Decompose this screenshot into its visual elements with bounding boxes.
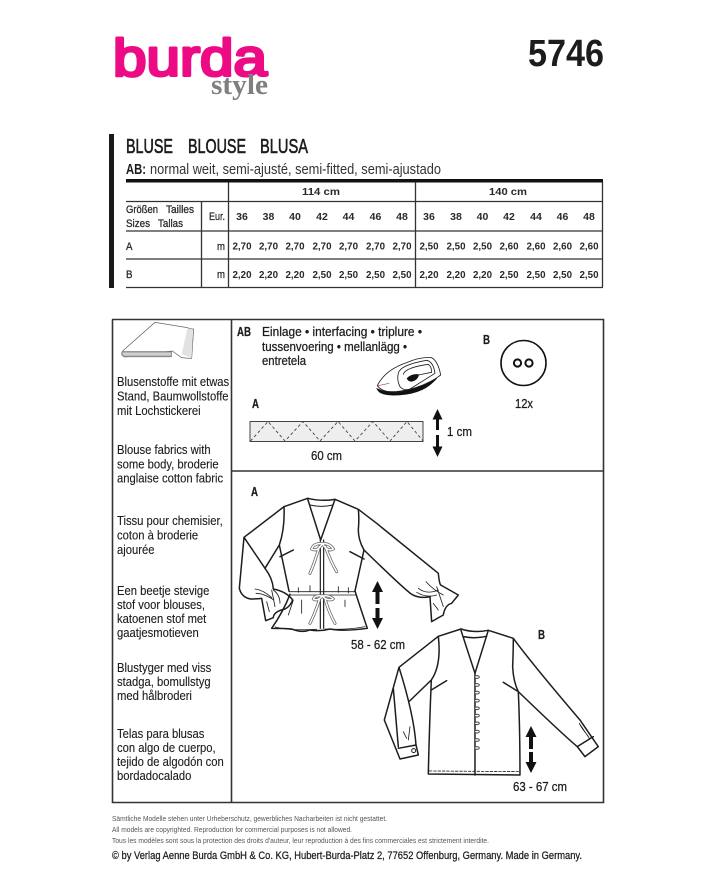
interfacing text [237, 324, 422, 368]
yardage table: 2,50 [526, 269, 546, 281]
interfacing text: tussenvoering • mellanlägg • [262, 340, 407, 354]
text: Spanish: Telas para blusas [117, 726, 204, 741]
text: Swedish [117, 660, 211, 703]
interfacing text: AB [237, 324, 251, 339]
text: French [117, 513, 223, 557]
yardage table: 36 [236, 211, 248, 223]
text: German [117, 374, 229, 418]
yardage table: 2,50 [553, 269, 572, 281]
yardage table: 2,70 [312, 240, 332, 252]
copyright notes: Sämtliche Modelle stehen unter Urheberschutz, gewerbliches Nacharbeiten ist nicht gestattet. [112, 814, 387, 823]
yardage table: A [126, 241, 133, 253]
illustration: blouse B [384, 629, 598, 775]
yardage table: B [126, 269, 132, 281]
text: Spanish: con algo de cuerpo, [117, 740, 216, 755]
yardage table: Sizes [126, 218, 150, 230]
yardage table: 2,50 [580, 269, 599, 281]
yardage table: Tailles [166, 204, 194, 216]
yardage table: Tallas [158, 218, 183, 230]
yardage table: 114 cm [302, 186, 340, 198]
garment B label: B [538, 627, 545, 642]
yardage table: 2,20 [286, 269, 305, 281]
yardage table: 42 [316, 211, 328, 223]
yardage table: 38 [450, 211, 462, 223]
yardage table: 44 [343, 211, 354, 223]
arrow: length A [351, 581, 405, 652]
yardage table: 2,70 [259, 240, 278, 252]
heading: BLUSA [260, 136, 308, 158]
copyright notes [112, 814, 582, 862]
yardage table: Größen [126, 204, 158, 216]
yardage table: 2,50 [500, 269, 519, 281]
yardage table: 2,70 [339, 240, 358, 252]
interfacing text: Einlage • interfacing • triplure • [262, 325, 422, 339]
icon: button: 12x [515, 396, 533, 411]
text: Dutch: gaatjesmotieven [117, 625, 199, 640]
arrow: strip width [432, 409, 472, 457]
yardage table: m [217, 241, 225, 253]
copyright notes: Tous les modèles sont sous la protection des droits d'auteur, leur reproduction à des fins commerciales est strictement interdite. [112, 836, 489, 845]
garment A label: A [251, 484, 258, 499]
yardage table: m [217, 269, 225, 281]
logo: burda style: style [211, 70, 268, 101]
text: Swedish: Blustyger med viss [117, 660, 211, 675]
interfacing strip A: 60 cm [311, 448, 342, 463]
interfacing strip A [250, 396, 423, 463]
left accent bar [109, 134, 114, 288]
text: German: Blusenstoffe mit etwas [117, 374, 229, 389]
text: French: ajourée [117, 542, 155, 557]
text: Dutch: stof voor blouses, [117, 597, 205, 612]
yardage table: 2,50 [446, 240, 466, 252]
yardage table: 2,20 [473, 269, 492, 281]
yardage table: 2,50 [366, 269, 385, 281]
heading: BLOUSE [188, 136, 246, 158]
text: Dutch: Een beetje stevige [117, 583, 210, 598]
icon: button [483, 332, 546, 411]
text: English: some body, broderie [117, 457, 219, 472]
icon: lower bow [310, 596, 335, 623]
text: English: Blouse fabrics with [117, 442, 211, 457]
text: Swedish: med hålbroderi [117, 688, 192, 703]
text: German: Stand, Baumwollstoffe [117, 389, 229, 404]
yardage table: 2,60 [500, 240, 519, 252]
text: French: coton à broderie [117, 528, 198, 543]
yardage table: 2,20 [446, 269, 466, 281]
text: Spanish [117, 726, 224, 783]
copyright notes: All models are copyrighted. Reproduction for commercial purposes is not allowed. [112, 825, 352, 834]
yardage table [126, 179, 603, 288]
yardage table: 2,20 [232, 269, 252, 281]
text: Dutch: katoenen stof met [117, 611, 207, 626]
yardage table: 2,50 [312, 269, 332, 281]
yardage table: 2,70 [366, 240, 385, 252]
icon: iron [377, 358, 441, 395]
arrow: length B [513, 726, 567, 794]
logo: burda style: burda [113, 30, 267, 88]
yardage table: 2,60 [553, 240, 572, 252]
text: Dutch [117, 583, 210, 640]
yardage table: 2,70 [286, 240, 305, 252]
icon: folded fabric [122, 322, 194, 358]
yardage table: 2,50 [420, 240, 439, 252]
yardage table: 46 [370, 211, 381, 223]
yardage table: 44 [530, 211, 542, 223]
yardage table: 2,70 [232, 240, 252, 252]
arrow: length A: 58 - 62 cm [351, 637, 405, 652]
text: English [117, 442, 223, 486]
subheading: AB: [126, 161, 146, 178]
heading [126, 136, 308, 158]
yardage table: 2,20 [420, 269, 439, 281]
subheading: normal weit, semi-ajusté, semi-fitted, semi-ajustado [150, 161, 441, 178]
heading: BLUSE [126, 136, 173, 158]
text: English: anglaise cotton fabric [117, 471, 223, 486]
yardage table: 38 [263, 211, 274, 223]
yardage table: 2,50 [339, 269, 358, 281]
main panel frame [112, 320, 604, 802]
interfacing text: entretela [262, 354, 306, 368]
yardage table: 48 [396, 211, 408, 223]
icon: button: B [483, 332, 490, 347]
logo: burda style [113, 30, 268, 101]
yardage table: 36 [423, 211, 435, 223]
yardage table: 140 cm [489, 186, 527, 198]
illustration: blouse A [239, 498, 458, 631]
text: Swedish: stadga, bomullstyg [117, 674, 211, 689]
yardage table: 2,50 [392, 269, 412, 281]
yardage table: 2,20 [259, 269, 278, 281]
yardage table: 2,70 [392, 240, 412, 252]
yardage table: 42 [503, 211, 515, 223]
yardage table: 48 [583, 211, 595, 223]
interfacing strip A: A [252, 396, 259, 411]
text: Spanish: bordadocalado [117, 768, 192, 783]
yardage table: 2,60 [580, 240, 599, 252]
copyright notes: © by Verlag Aenne Burda GmbH & Co. KG, Hubert-Burda-Platz 2, 77652 Offenburg, Germany. Made in Germany. [112, 850, 582, 862]
arrow: strip width: 1 cm [447, 424, 472, 439]
text: German: mit Lochstickerei [117, 403, 201, 418]
yardage table: 46 [557, 211, 568, 223]
yardage table: 2,60 [526, 240, 546, 252]
fabric descriptions [117, 374, 229, 783]
yardage table: Eur. [209, 211, 225, 223]
icon: upper bow [310, 543, 337, 573]
pattern number: 5746 [528, 33, 604, 75]
text: French: Tissu pour chemisier, [117, 513, 223, 528]
yardage table: 40 [477, 211, 488, 223]
yardage table: 40 [289, 211, 301, 223]
arrow: length B: 63 - 67 cm [513, 779, 567, 794]
yardage table: 2,50 [473, 240, 492, 252]
text: Spanish: tejido de algodón con [117, 754, 224, 769]
